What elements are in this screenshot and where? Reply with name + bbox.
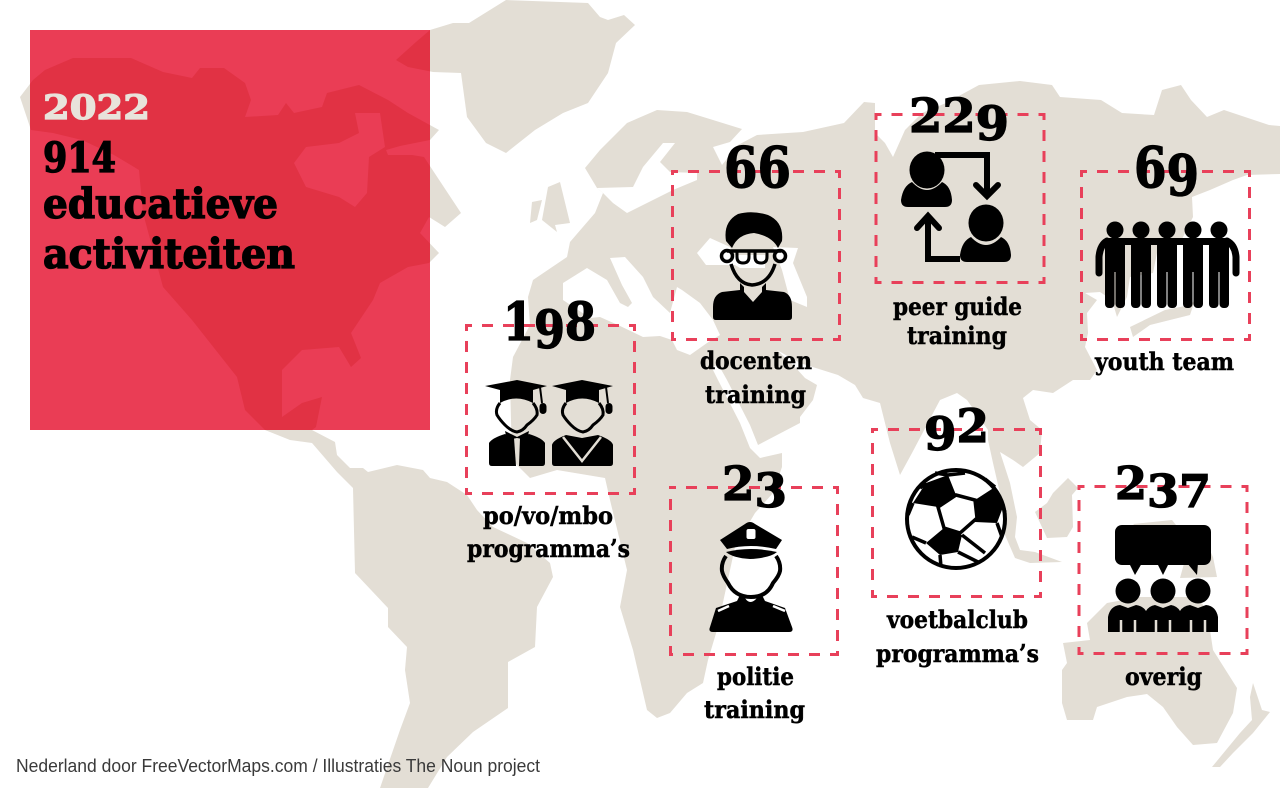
title: 914 [43,134,116,182]
icon: police officer [709,522,793,632]
panel: docenten training [672,135,840,409]
number 69: 69 [1134,135,1199,209]
number 229: 229 [909,89,1009,152]
label: training [705,380,806,409]
title [43,134,295,278]
panel: politie training [670,457,838,724]
number 66: 66 [724,135,791,201]
label: youth team [1094,347,1234,376]
label: voetbalclub [886,605,1028,634]
number 92: 92 [924,399,989,461]
label [704,662,805,724]
label: programma’s [876,639,1039,668]
footer credit: Nederland door FreeVectorMaps.com / Illustraties The Noun project [16,756,540,776]
label: politie [717,662,794,691]
label [876,605,1039,668]
label: overig [1125,662,1202,691]
panel: voetbalclub programma's [872,399,1040,668]
title: educatieve [43,180,278,228]
label: po/vo/mbo [483,501,613,530]
icon: peer exchange with arrows [901,152,1011,262]
number 23: 23 [722,457,787,519]
year heading: 2022 [43,88,150,128]
icon: two graduates [485,380,613,466]
panel: po/vo/mbo programma's [466,292,634,563]
label [467,501,630,563]
label: training [704,695,805,724]
label [893,292,1022,350]
label [700,346,812,409]
icon: teacher with glasses [713,212,792,320]
label: docenten [700,346,812,375]
number 198: 198 [503,292,596,361]
icon: five people in a row [1099,222,1236,308]
panel: youth team [1082,135,1250,376]
number 237: 237 [1115,457,1211,518]
icon: football [907,470,1005,568]
title: activiteiten [43,230,295,278]
panel: peer guide training [876,89,1044,350]
label: peer guide [893,292,1022,321]
label: programma’s [467,534,630,563]
panel: red title square [30,30,430,430]
label: training [907,321,1007,350]
icon: group with speech bubble [1108,525,1218,632]
panel: overig [1079,457,1247,691]
